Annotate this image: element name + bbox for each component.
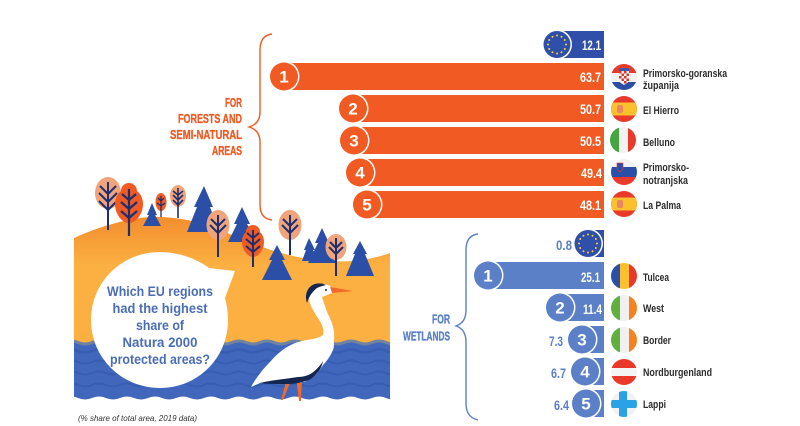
forest region labels: notranjska <box>643 175 689 187</box>
bubble question text: had the highest <box>112 300 208 316</box>
bar rank 5 <box>352 189 604 220</box>
bar rank 1: 63.7 <box>580 69 601 85</box>
heading: for forests and semi-natural areas: FORESTS AND <box>178 111 242 126</box>
bar rank 1 <box>472 260 604 291</box>
footnote: (% share of total area, 2019 data) <box>78 413 197 423</box>
bar rank 2: 11.4 <box>583 301 602 317</box>
forest region labels: županija <box>643 80 680 92</box>
bar rank 4 <box>551 356 604 387</box>
bar rank 3: 3 <box>577 330 587 350</box>
forest region labels: La Palma <box>643 200 682 212</box>
speech bubble <box>91 252 235 388</box>
heading: for forests and semi-natural areas: AREAS <box>212 143 242 158</box>
flag: Ireland, West <box>611 295 637 321</box>
pines, back row <box>143 186 374 280</box>
EU average bar <box>542 30 604 60</box>
bar rank 2: 50.7 <box>580 101 601 117</box>
bar rank 4: 49.4 <box>581 165 602 181</box>
flag: Finland <box>611 391 637 417</box>
bar rank 2 <box>544 292 604 323</box>
bar rank 5: 6.4 <box>554 397 569 413</box>
bar rank 3 <box>338 125 604 156</box>
bar rank 5 <box>554 388 604 419</box>
forest region labels: Primorsko-goranska <box>643 68 728 80</box>
flag: Austria <box>611 359 637 385</box>
bubble question text: Which EU regions <box>107 283 213 299</box>
bar rank 4: 6.7 <box>551 365 566 381</box>
bar rank 3: 3 <box>349 132 359 150</box>
flag: Croatia <box>611 64 637 90</box>
brace: forests <box>249 34 272 220</box>
bubble question text: share of <box>136 317 184 333</box>
bar rank 2 <box>338 93 604 124</box>
heading: for forests and semi-natural areas: FOR <box>225 95 242 110</box>
heading: for wetlands <box>403 312 450 344</box>
bar rank 4: 4 <box>355 164 365 182</box>
bubble question text: protected areas? <box>110 351 210 367</box>
bar rank 1: 1 <box>483 266 493 286</box>
flag: Romania <box>611 263 637 289</box>
hill <box>74 217 390 345</box>
illustration: landscape with heron <box>64 177 400 401</box>
brace: wetlands <box>456 234 478 420</box>
heading: for wetlands: FOR <box>432 312 450 326</box>
flag: Slovenia <box>611 159 637 185</box>
bar rank 2: 2 <box>348 100 358 118</box>
deciduous trees <box>95 177 346 276</box>
heading: for forests and semi-natural areas: SEMI-NATURAL <box>170 127 242 142</box>
bubble question text: Natura 2000 <box>122 334 198 350</box>
bar rank 4 <box>344 157 604 188</box>
flag: Ireland, Border <box>611 327 637 353</box>
heron <box>251 283 353 401</box>
bar rank 3: 50.5 <box>580 133 601 149</box>
bar rank 1 <box>268 61 604 92</box>
wetland region labels: Nordburgenland <box>643 367 712 379</box>
bar rank 5: 5 <box>581 394 591 414</box>
flag: Spain, El Hierro <box>611 96 637 122</box>
wetland region labels: West <box>643 303 664 315</box>
flag: Italy <box>610 127 636 153</box>
heading: for forests and semi-natural areas <box>170 95 242 158</box>
bar rank 4: 4 <box>580 362 590 382</box>
flag: Spain, La Palma <box>611 191 637 217</box>
water <box>64 340 400 400</box>
bar rank 5: 5 <box>362 196 372 214</box>
forest region labels: El Hierro <box>643 105 679 117</box>
bubble question text <box>107 283 213 367</box>
bar rank 3 <box>549 324 604 355</box>
forest region labels: Belluno <box>643 137 675 149</box>
bar rank 2: 2 <box>555 298 565 318</box>
bar rank 1: 1 <box>279 68 289 86</box>
wetland region labels: Tulcea <box>643 272 670 284</box>
heading: for wetlands: WETLANDS <box>403 328 450 344</box>
wetland region labels: Border <box>643 335 672 347</box>
wetland region labels <box>643 272 712 411</box>
bar rank 1: 25.1 <box>581 269 600 285</box>
EU average bar: 12.1 <box>582 37 601 53</box>
forest region labels <box>643 68 728 212</box>
bar rank 5: 48.1 <box>580 197 601 213</box>
bar rank 3: 7.3 <box>549 333 563 349</box>
bar chart: wetlands <box>472 228 604 419</box>
forest region labels: Primorsko- <box>643 162 689 174</box>
wetland region labels: Lappi <box>643 399 666 411</box>
bar chart: forests <box>268 30 604 220</box>
EU average bar <box>556 228 604 258</box>
EU average bar: 0.8 <box>556 237 572 253</box>
